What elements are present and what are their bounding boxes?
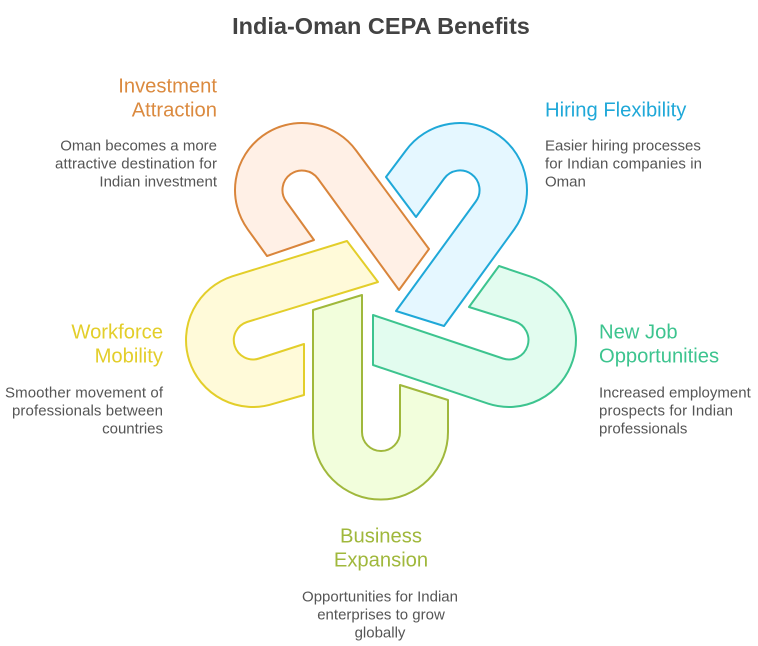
label: Workforce Mobility [5,322,164,438]
label: Hiring Flexibility: Hiring Flexibility [545,100,687,122]
label: New Job Opportunities: professionals [599,420,687,438]
label: New Job Opportunities: Opportunities [599,346,719,368]
label: New Job Opportunities [599,322,752,438]
label: New Job Opportunities: prospects for Indian [599,402,733,420]
diagram: interlocking links [186,123,576,500]
label: Hiring Flexibility [545,100,702,190]
label: Hiring Flexibility: Easier hiring processes [545,138,701,154]
label: Workforce Mobility: Smoother movement of [5,384,164,402]
link: Business Expansion [313,295,448,500]
title: India-Oman CEPA Benefits [232,13,530,39]
label: Workforce Mobility: countries [102,420,163,438]
link: Hiring Flexibility [386,123,527,326]
label: Business Expansion: globally [355,624,406,642]
label: Investment Attraction: Attraction [132,100,217,122]
link: Workforce Mobility [186,241,378,407]
label: Hiring Flexibility: for Indian companies in [545,156,702,172]
link: Investment Attraction [235,123,429,290]
label: Investment Attraction [55,76,218,190]
label: Business Expansion: Business [340,526,422,548]
label: New Job Opportunities: Increased employment [599,384,752,402]
label: Investment Attraction: Investment [118,76,217,98]
label: Hiring Flexibility: Oman [545,174,586,190]
label: Workforce Mobility: professionals between [12,402,163,420]
label: Investment Attraction: Indian investment [99,174,218,190]
label: New Job Opportunities: New Job [599,322,678,344]
link: New Job Opportunities [373,266,576,407]
label: Business Expansion [302,526,458,642]
label: Workforce Mobility: Workforce [71,322,163,344]
label: Business Expansion: Opportunities for Indian [302,588,458,606]
label: Investment Attraction: Oman becomes a more [60,138,217,154]
label: Business Expansion: enterprises to grow [317,606,445,624]
label: Workforce Mobility: Mobility [95,346,164,368]
label: Investment Attraction: attractive destination for [55,156,217,172]
label: Business Expansion: Expansion [334,550,428,572]
